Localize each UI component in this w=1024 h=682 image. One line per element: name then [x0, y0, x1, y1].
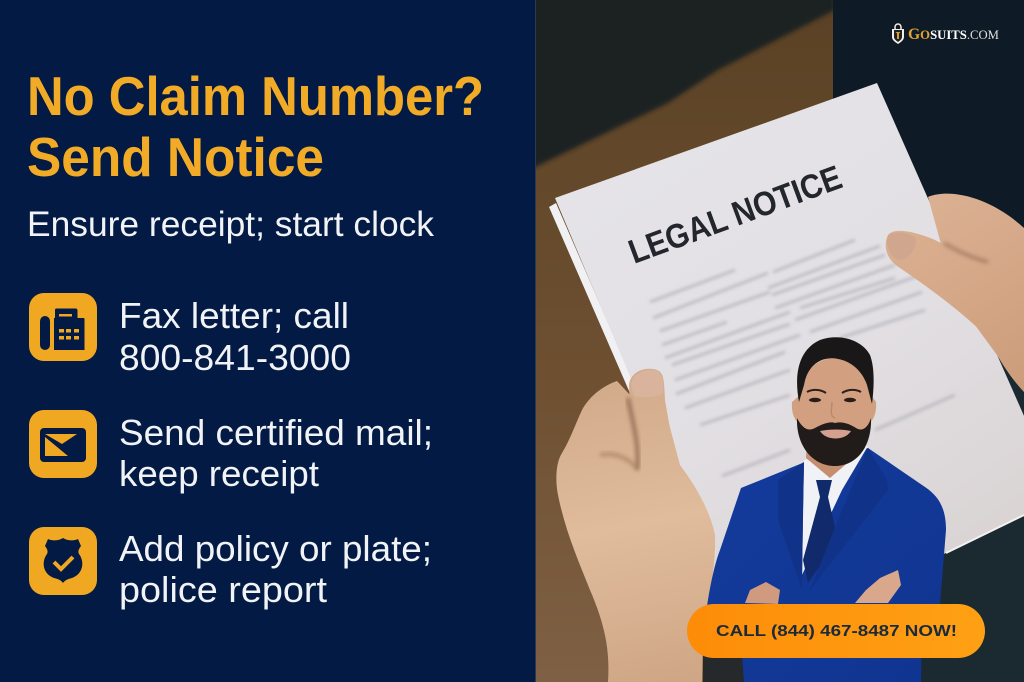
logo wordmark: GOSUITS.COM — [908, 26, 999, 43]
right hand holding document — [886, 194, 1024, 392]
dark strip under portrait — [703, 655, 745, 682]
tie — [803, 480, 838, 583]
shirt — [802, 446, 868, 575]
photo background — [525, 0, 1024, 682]
icon: shield badge with check — [29, 527, 97, 595]
bullet text: fax — [119, 295, 351, 378]
bullet text: police: police report — [119, 569, 327, 610]
attorney portrait — [703, 337, 946, 682]
mouth — [820, 430, 851, 438]
bullet text: fax: Fax letter; call — [119, 295, 349, 336]
face — [792, 358, 876, 463]
title: No Claim Number? — [27, 65, 484, 127]
subtitle: Ensure receipt; start clock — [27, 205, 435, 244]
legal notice document — [549, 83, 1024, 640]
bullet text: fax: 800-841-3000 — [119, 337, 351, 378]
logo: GoSuits.com — [892, 24, 999, 44]
blurred body text — [650, 240, 955, 476]
bullet text: police — [119, 528, 432, 610]
logo icon: lock shield — [892, 24, 904, 44]
title — [27, 65, 484, 188]
nose shadow — [831, 402, 835, 418]
icon: fax machine — [29, 293, 97, 361]
icon: envelope — [29, 410, 97, 478]
eyebrows — [807, 390, 861, 393]
eyes — [809, 398, 856, 402]
title: Send Notice — [27, 126, 324, 188]
heading on document: LEGAL NOTICE — [624, 158, 847, 272]
bullet text: police: Add policy or plate; — [119, 528, 432, 569]
beard — [797, 418, 871, 466]
left hand holding document — [556, 369, 715, 682]
bullet: police report — [29, 527, 432, 610]
hair — [797, 337, 874, 404]
suit — [703, 448, 946, 682]
left navy panel — [0, 0, 535, 682]
neck — [806, 440, 865, 478]
bullet text: mail: keep receipt — [119, 453, 319, 494]
bullet text: mail: Send certified mail; — [119, 412, 433, 453]
bullet: certified mail — [29, 410, 433, 494]
bullet: fax — [29, 293, 351, 378]
call to action button: CALL (844) 467-8487 NOW! — [716, 623, 957, 640]
bullet text: mail — [119, 412, 433, 494]
call to action button — [687, 604, 985, 658]
lapels — [778, 462, 804, 590]
crossed arms — [745, 570, 901, 604]
